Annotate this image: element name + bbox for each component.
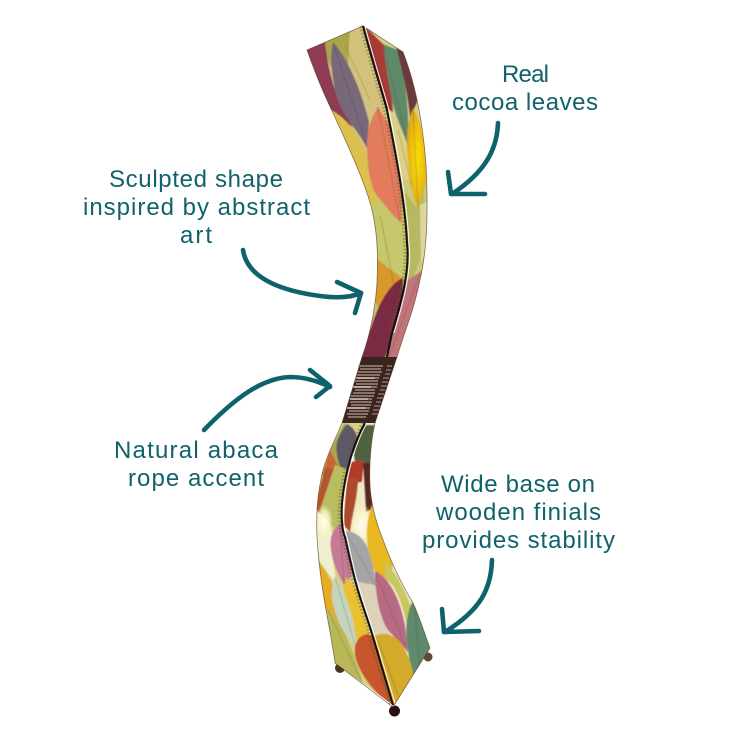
abaca rope band (342, 357, 397, 423)
callout: real cocoa leaves: Real (502, 61, 549, 88)
arrow: to cocoa leaves (448, 123, 498, 194)
lamp (306, 26, 432, 716)
arrow: to wide base (442, 560, 492, 632)
lamp outline (307, 26, 430, 707)
callout: sculpted shape: inspired by abstract (83, 194, 310, 221)
right face with leaves (342, 26, 430, 707)
arrow: to abaca rope (204, 370, 330, 430)
callout: sculpted shape: art (180, 222, 212, 249)
wooden finials (335, 652, 432, 716)
callout: wide base: Wide base on (441, 471, 595, 498)
callout: abaca rope: rope accent (128, 465, 264, 492)
centre seam (340, 26, 410, 705)
callout: abaca rope (114, 437, 279, 492)
callout: wide base (422, 471, 615, 554)
callout: wide base: provides stability (422, 527, 615, 554)
callout: sculpted shape (83, 166, 310, 249)
callout: wide base: wooden finials (435, 499, 601, 526)
callout: abaca rope: Natural abaca (114, 437, 279, 464)
arrow: to sculpted shape (243, 250, 361, 313)
callout: real cocoa leaves: cocoa leaves (452, 89, 598, 116)
callout: sculpted shape: Sculpted shape (109, 166, 283, 193)
left face with leaves (307, 26, 407, 704)
callout: real cocoa leaves (452, 61, 598, 116)
